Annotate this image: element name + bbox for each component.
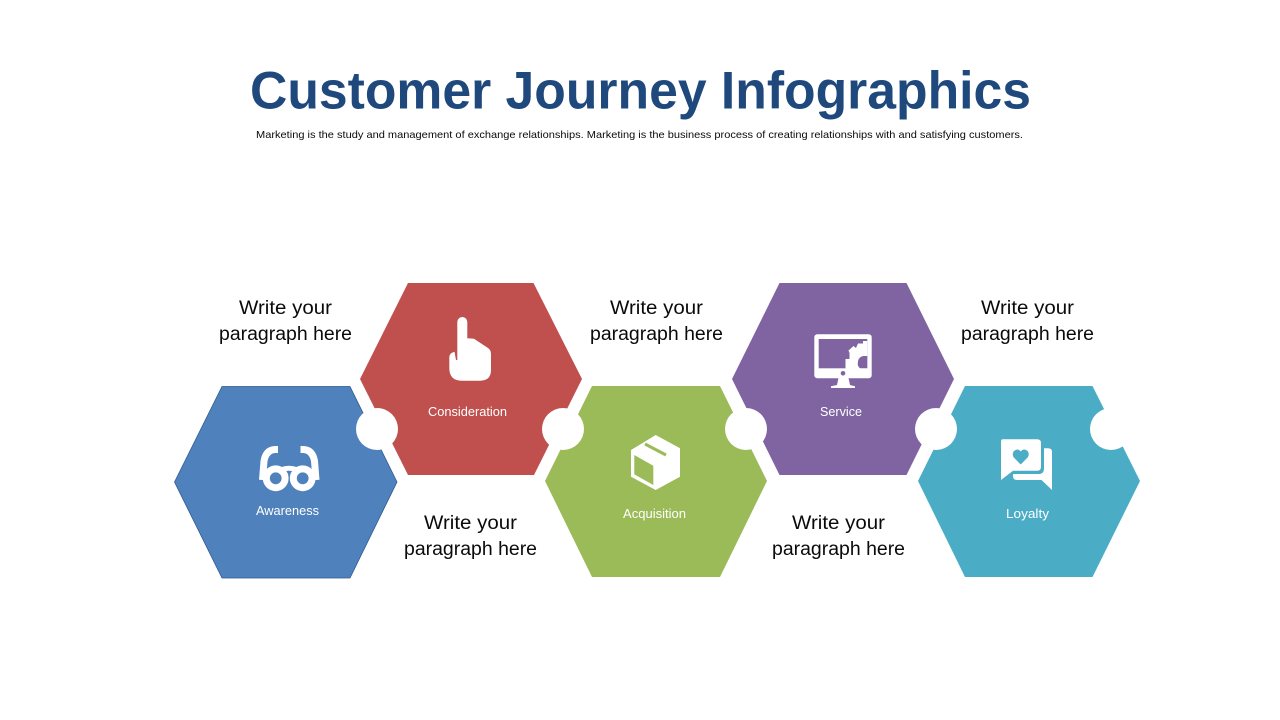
hexagon: Loyalty — [918, 386, 1140, 577]
text block: bottom right paragraph — [772, 513, 905, 560]
hexagon: Service — [732, 283, 954, 475]
title: Customer Journey Infographics — [250, 62, 1031, 120]
connector circle 4 — [915, 408, 957, 450]
text block: top right paragraph: Write your — [981, 298, 1075, 319]
hexagon: Consideration — [360, 283, 582, 475]
icon: chat bubbles with heart — [1001, 439, 1052, 490]
label: Service: Service — [820, 405, 862, 419]
text block: bottom right paragraph: Write your — [792, 513, 886, 534]
text block: top middle paragraph — [590, 298, 723, 345]
icon: pointing hand — [449, 317, 491, 381]
text block: bottom left paragraph — [404, 513, 537, 560]
text block: top right paragraph: paragraph here — [961, 324, 1094, 345]
icon: glasses — [262, 450, 316, 488]
text block: bottom left paragraph: paragraph here — [404, 539, 537, 560]
text block: top left paragraph: paragraph here — [219, 324, 352, 345]
connector circle 5 — [1090, 408, 1132, 450]
text block: top middle paragraph: paragraph here — [590, 324, 723, 345]
text block: bottom left paragraph: Write your — [424, 513, 518, 534]
connector circle 2 — [542, 408, 584, 450]
hexagon: Awareness — [174, 386, 397, 578]
label: Loyalty: Loyalty — [1006, 507, 1050, 521]
icon: monitor with gear — [814, 334, 872, 388]
label: Consideration: Consideration — [428, 405, 507, 419]
connector circle 3 — [725, 408, 767, 450]
subtitle: Marketing is the study and management of exchange relationships. Marketing is the business process of creating relationships with and satisfying customers. — [256, 129, 1023, 141]
hexagon: Acquisition — [545, 386, 767, 577]
label: Acquisition: Acquisition — [623, 507, 686, 521]
text block: top right paragraph — [961, 298, 1094, 345]
label: Awareness: Awareness — [256, 504, 319, 518]
text block: top middle paragraph: Write your — [610, 298, 704, 319]
connector circle 1 — [356, 408, 398, 450]
text block: top left paragraph — [219, 298, 352, 345]
text block: top left paragraph: Write your — [239, 298, 333, 319]
text block: bottom right paragraph: paragraph here — [772, 539, 905, 560]
icon: box — [631, 435, 680, 490]
